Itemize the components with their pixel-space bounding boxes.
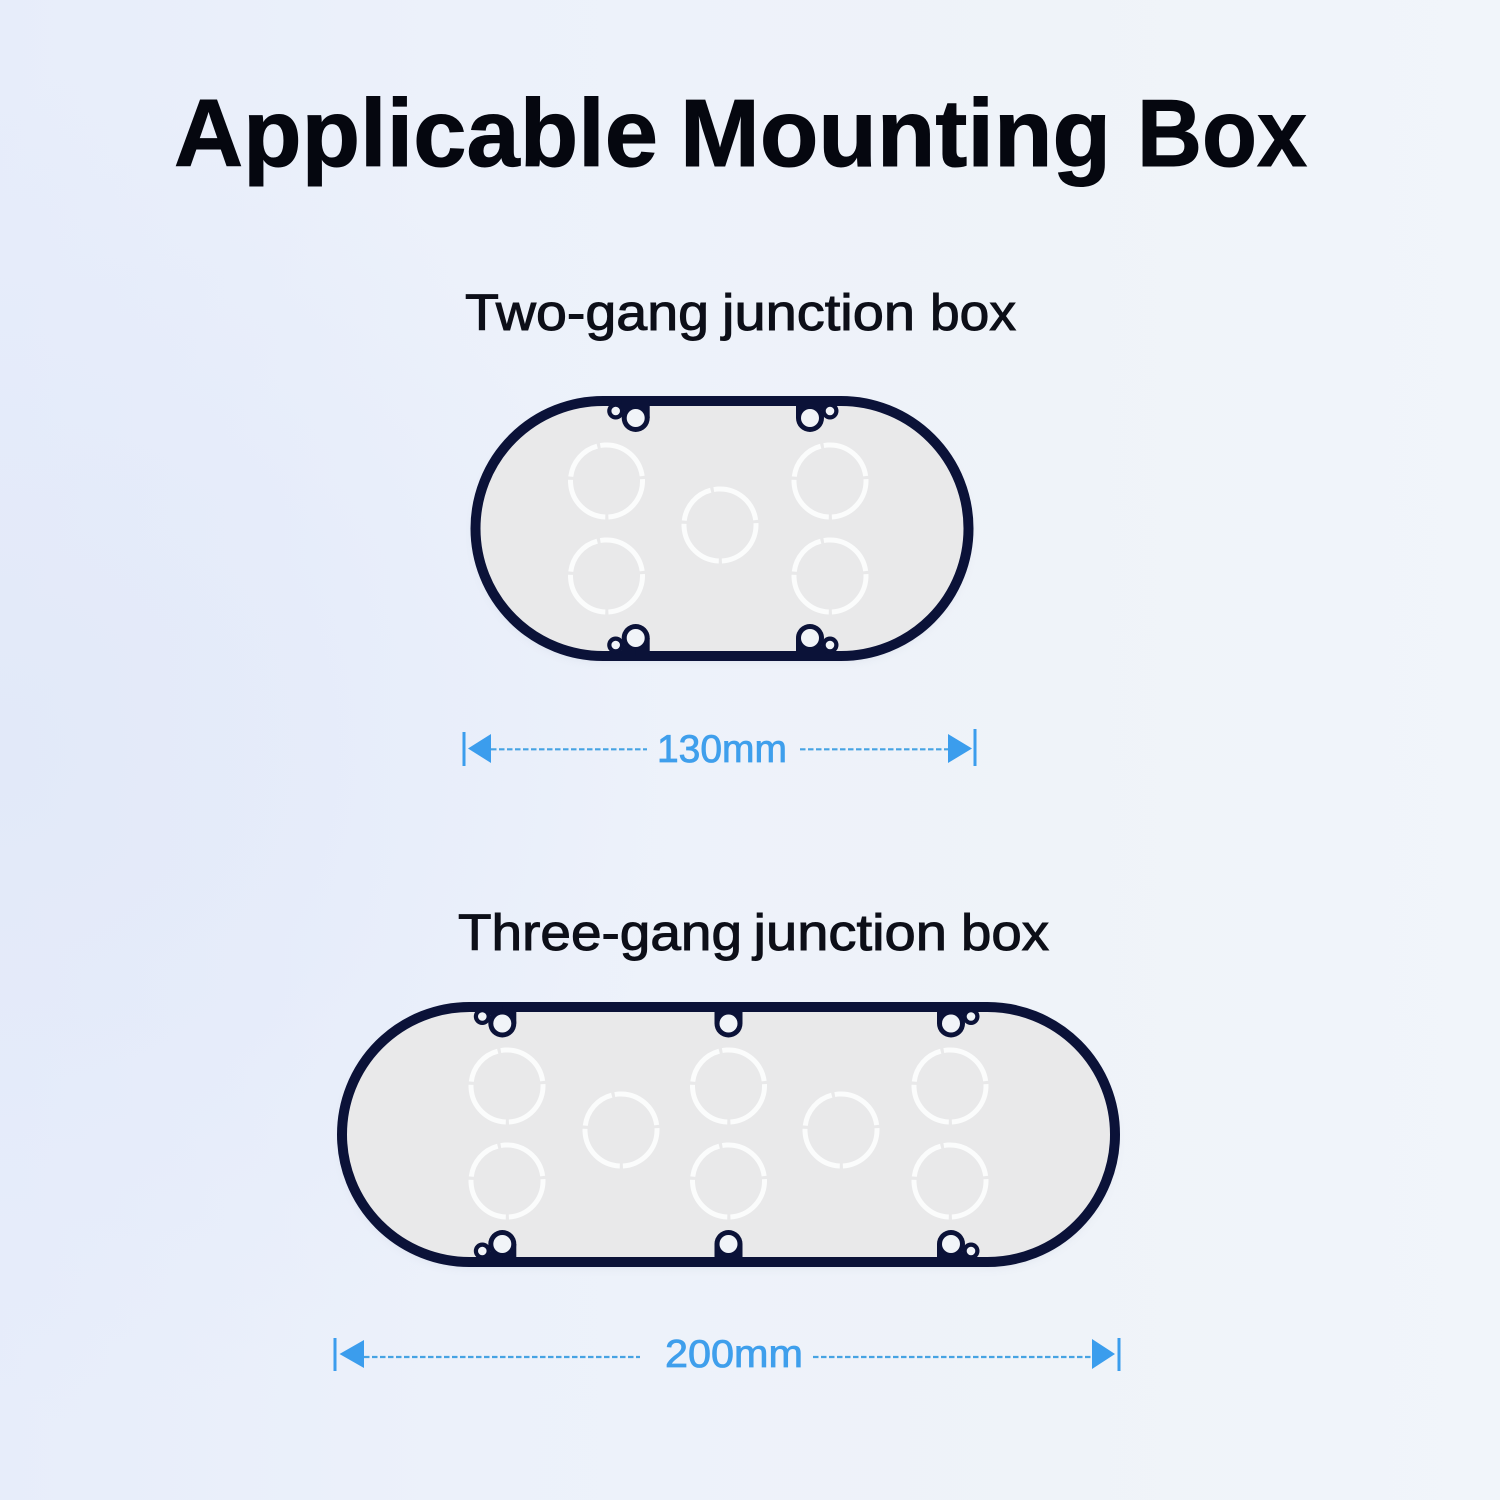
box outline	[342, 1007, 1115, 1262]
heading: two-gang: Two-gang	[465, 284, 709, 341]
title	[174, 80, 1307, 187]
box outline	[476, 401, 968, 656]
diagram: three-gang junction box	[342, 1006, 1115, 1266]
heading: three-gang	[458, 904, 1049, 961]
dimension: 200mm	[334, 1333, 1120, 1376]
dimension: 130mm	[462, 728, 976, 771]
mounting lugs	[474, 1006, 980, 1262]
heading: two-gang: box	[930, 284, 1016, 341]
title: Applicable	[174, 80, 658, 187]
mounting lugs	[607, 400, 838, 656]
diagram: two-gang junction box	[476, 400, 968, 660]
heading: three-gang: box	[961, 904, 1049, 961]
heading: three-gang: junction	[751, 904, 947, 961]
heading: two-gang: junction	[720, 284, 915, 341]
knockout circles	[569, 443, 868, 614]
knockout circles	[469, 1048, 988, 1219]
heading: three-gang: Three-gang	[458, 904, 742, 961]
title: Box	[1137, 80, 1307, 187]
dimension: 200mm: 200mm	[665, 1333, 803, 1376]
title: Mounting	[680, 80, 1111, 187]
heading: two-gang	[465, 284, 1016, 341]
dimension: 130mm: 130mm	[657, 728, 787, 771]
